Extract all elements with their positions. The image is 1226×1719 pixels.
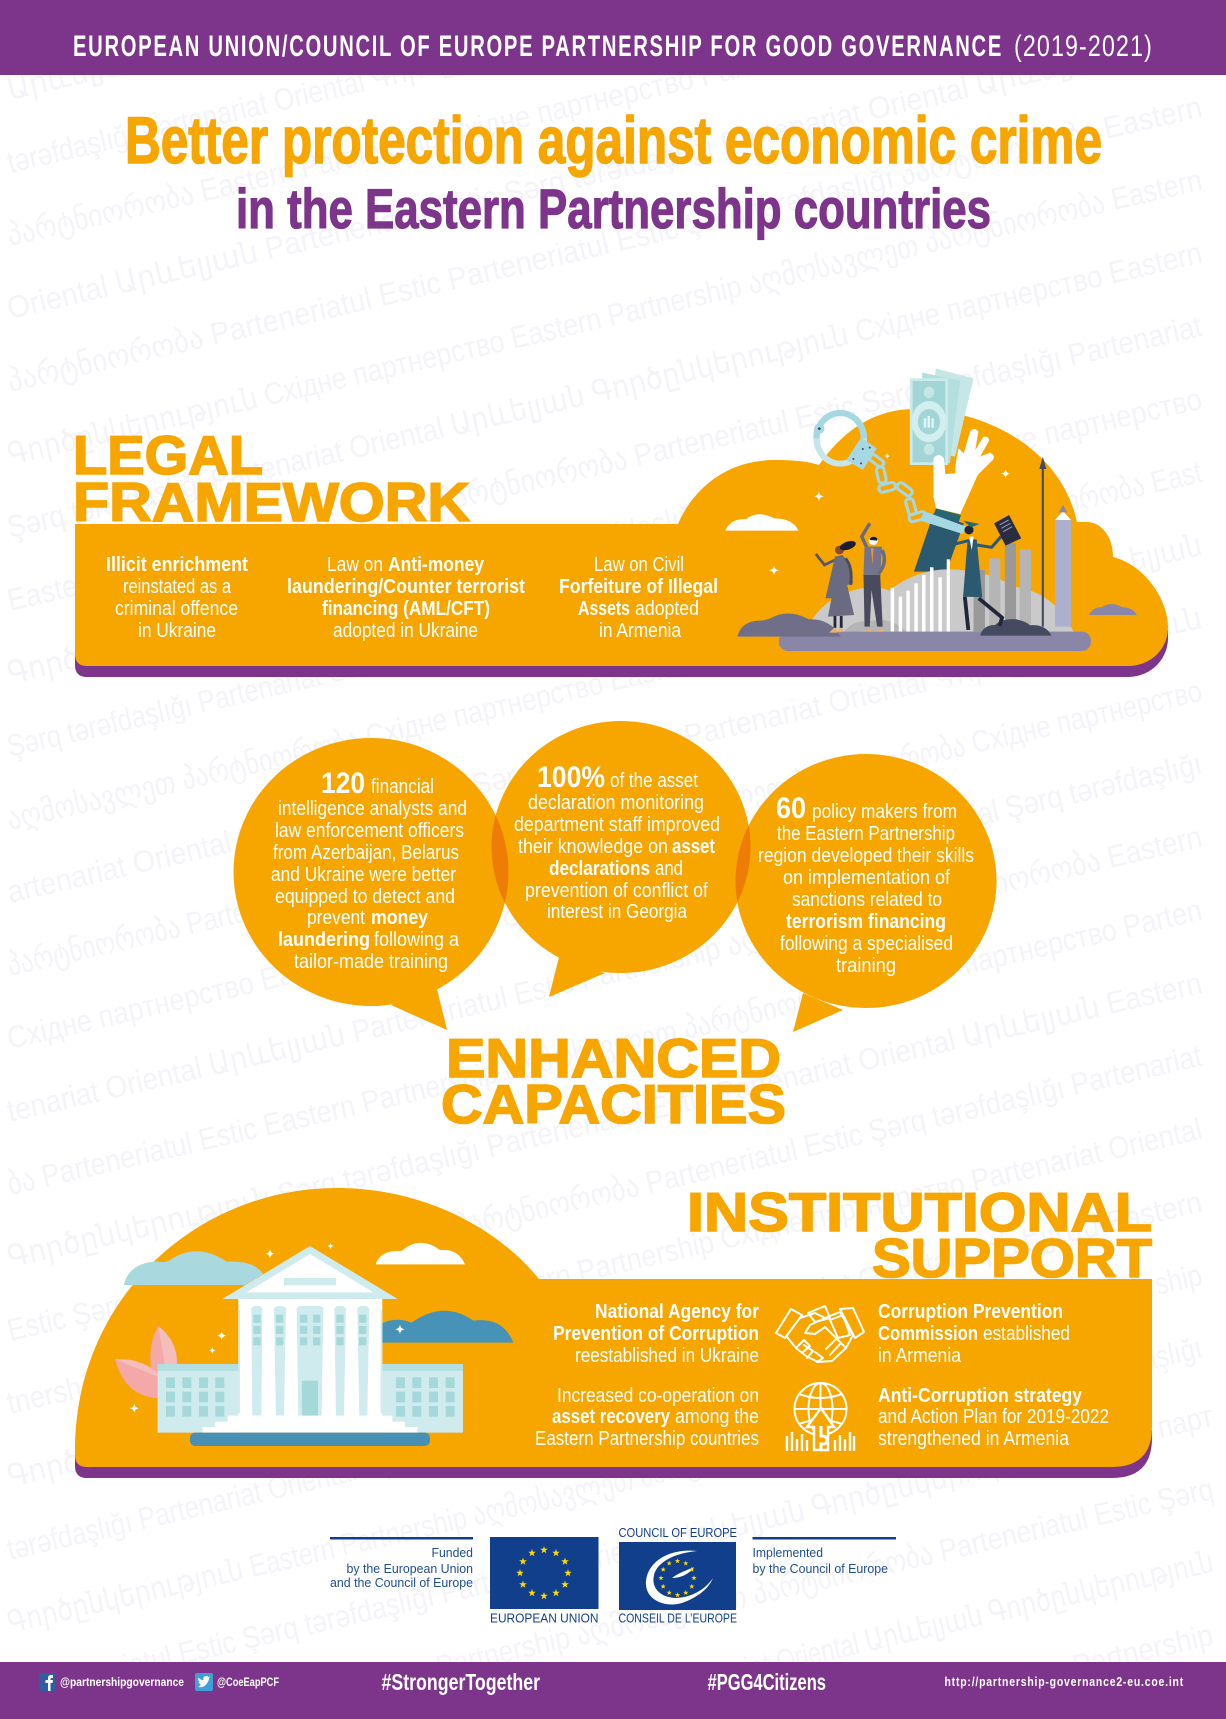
- legal framework heading: LEGAL: [73, 424, 263, 486]
- icon: globe with arrow and puzzle: [787, 1383, 854, 1451]
- legal framework shadow shape: [75, 630, 1168, 677]
- legal framework orange cloud band: [75, 409, 1168, 666]
- panel: institutional support: [75, 1181, 1152, 1478]
- text: 60 policy makers: sanctions related to: [792, 889, 942, 911]
- main portico: [190, 1246, 430, 1446]
- text: 100% staff: asset: [672, 836, 715, 858]
- text: corruption prevention commission: in Armenia: [878, 1345, 962, 1367]
- text: anti-money laundering law: adopted in Ukraine: [333, 620, 478, 642]
- hills and bars: [805, 543, 1073, 632]
- text: 120 officers: money: [371, 907, 429, 929]
- figure: woman: [816, 539, 857, 633]
- text: 60 policy makers: on implementation of: [783, 867, 950, 889]
- text: civil forfeiture law: Law on Civil: [594, 554, 684, 576]
- institutional support heading: INSTITUTIONAL: [687, 1181, 1152, 1243]
- text: anti-money laundering law: Law on: [327, 554, 383, 576]
- institutional support orange dome band: [75, 1188, 1152, 1467]
- text: illicit enrichment: reinstated as a: [123, 576, 232, 598]
- text: 120 officers: 120: [321, 767, 365, 800]
- icon: facebook: [39, 1673, 55, 1691]
- text: national agency: National Agency for: [595, 1301, 759, 1323]
- text: illicit enrichment: criminal offence: [115, 598, 238, 620]
- logo: Council of Europe: CONSEIL DE L’EUROPE: [618, 1612, 737, 1626]
- clouds: [124, 1243, 513, 1343]
- text: twitter handle: @CoeEapPCF: [217, 1675, 279, 1689]
- text: 60 policy makers: policy makers from: [812, 801, 957, 823]
- text: 100% staff: [514, 761, 720, 923]
- text: asset recovery: Eastern Partnership countries: [535, 1428, 759, 1450]
- text: 60 policy makers: terrorism financing: [786, 911, 946, 933]
- enhanced capacities heading: CAPACITIES: [441, 1073, 786, 1135]
- text: 100% staff: their knowledge on: [518, 836, 668, 858]
- text: 120 officers: intelligence analysts and: [278, 798, 467, 820]
- text: corruption prevention commission: [878, 1301, 1070, 1367]
- text: 120 officers: [271, 767, 467, 973]
- text: 120 officers: laundering: [278, 929, 370, 951]
- text: civil forfeiture law: Forfeiture of Illegal: [559, 576, 718, 598]
- institutional support shadow shape: [75, 1430, 1152, 1478]
- text: 60 policy makers: training: [836, 955, 896, 977]
- text: civil forfeiture law: Assets: [578, 598, 630, 620]
- text: anti-money laundering law: laundering/Counter terrorist: [287, 576, 525, 598]
- header banner: (2019-2021): [1014, 30, 1153, 63]
- text: 60 policy makers: following a specialised: [780, 933, 953, 955]
- text: civil forfeiture law: in Armenia: [599, 620, 682, 642]
- figure: man: [861, 523, 884, 632]
- text: anti-money laundering law: Anti-money: [388, 554, 485, 576]
- text: facebook handle: @partnershipgovernance: [60, 1675, 184, 1689]
- text: 120 officers: tailor-made training: [294, 951, 448, 973]
- text: anti-money laundering law: financing (AML/CFT): [322, 598, 490, 620]
- text: anti-corruption strategy: [878, 1385, 1109, 1450]
- panel: legal framework: [73, 368, 1168, 677]
- funded by text: Funded: [432, 1546, 473, 1560]
- text: 120 officers: from Azerbaijan, Belarus: [273, 842, 459, 864]
- logo: Council of Europe: COUNCIL OF EUROPE: [618, 1526, 737, 1540]
- title: in the Eastern Partnership countries: [236, 177, 991, 240]
- text: 100% staff: and: [655, 858, 683, 880]
- sparkles: [130, 1243, 405, 1413]
- icon: twitter: [195, 1673, 213, 1691]
- illustration: justice and money: [725, 368, 1137, 651]
- text: 100% staff: declarations: [549, 858, 650, 880]
- text: anti-corruption strategy: and Action Plan for 2019-2022: [878, 1406, 1109, 1428]
- text: asset recovery: [535, 1385, 759, 1450]
- text: illicit enrichment: [106, 554, 248, 642]
- icon: handshake: [776, 1306, 864, 1362]
- icon: handcuff and chain: [814, 413, 927, 522]
- text: 60 policy makers: [758, 792, 974, 977]
- legal framework heading: [73, 424, 470, 533]
- text: illicit enrichment: in Ukraine: [138, 620, 216, 642]
- text: civil forfeiture law: [559, 554, 718, 642]
- institutional support heading: [687, 1181, 1152, 1289]
- funded by text: by the European Union: [346, 1562, 473, 1576]
- icon: banknotes: [910, 368, 974, 465]
- text: 100% staff: department staff improved: [514, 814, 720, 836]
- logo: European Union flag: EUROPEAN UNION: [490, 1610, 598, 1626]
- logo: European Union flag: [490, 1537, 598, 1626]
- leaves: [115, 1326, 177, 1398]
- text: national agency: Prevention of Corruption: [553, 1323, 759, 1345]
- text: 120 officers: prevent: [307, 907, 365, 929]
- base and clouds: [725, 514, 1137, 651]
- text: 120 officers: and Ukraine were better: [271, 864, 456, 886]
- text: hashtag PGG4Citizens: #PGG4Citizens: [708, 1669, 826, 1695]
- text: 60 policy makers: the Eastern Partnership: [777, 823, 955, 845]
- text: corruption prevention commission: Corruption Prevention: [878, 1301, 1063, 1323]
- text: 60 policy makers: 60: [776, 792, 806, 825]
- legal framework heading: FRAMEWORK: [73, 471, 470, 533]
- text: anti-corruption strategy: strengthened in Armenia: [878, 1428, 1070, 1450]
- funded by text: and the Council of Europe: [330, 1576, 473, 1590]
- speech bubble: 120 officers: [234, 738, 508, 1030]
- text: 100% staff: declaration monitoring: [528, 792, 704, 814]
- bubble overlaps: [492, 721, 750, 973]
- enhanced capacities heading: [441, 1027, 786, 1135]
- text: 100% staff: prevention of conflict of: [525, 880, 708, 902]
- icon: hand grabbing money: [914, 429, 994, 572]
- speech bubble: 60 policy makers: [736, 754, 996, 1032]
- text: hashtag stronger together: #StrongerTogether: [382, 1669, 540, 1695]
- implemented by text: by the Council of Europe: [752, 1562, 888, 1576]
- funded by text: [330, 1537, 473, 1590]
- implemented by text: [752, 1537, 896, 1576]
- enhanced capacities heading: ENHANCED: [446, 1027, 781, 1089]
- footer banner: [0, 1662, 1226, 1719]
- text: asset recovery: Increased co-operation on: [557, 1385, 759, 1407]
- text: asset recovery: asset recovery: [552, 1406, 671, 1428]
- text: national agency: [553, 1301, 759, 1367]
- text: 120 officers: law enforcement officers: [275, 820, 464, 842]
- logos and funding credits: [330, 1526, 896, 1626]
- text: asset recovery: among the: [675, 1406, 759, 1428]
- text: 100% staff: of the asset: [610, 770, 698, 792]
- institutional support heading: SUPPORT: [872, 1227, 1152, 1289]
- text: corruption prevention commission: established: [983, 1323, 1070, 1345]
- illustration: government building: [115, 1243, 513, 1446]
- implemented by text: Implemented: [752, 1546, 823, 1560]
- text: 120 officers: equipped to detect and: [275, 886, 455, 908]
- icon: pencil tower and arrow: [1039, 457, 1071, 627]
- text: illicit enrichment: Illicit enrichment: [106, 554, 248, 576]
- text: anti-corruption strategy: Anti-Corruption strategy: [878, 1385, 1083, 1407]
- text: 100% staff: 100%: [537, 761, 605, 794]
- text: 120 officers: financial: [371, 776, 434, 798]
- text: national agency: reestablished in Ukraine: [575, 1345, 759, 1367]
- text: civil forfeiture law: adopted: [635, 598, 699, 620]
- text: corruption prevention commission: Commission: [878, 1323, 978, 1345]
- speech bubble: 100% staff: [492, 721, 750, 997]
- figure: judge: [938, 515, 1021, 630]
- text: 60 policy makers: region developed their skills: [758, 845, 974, 867]
- title: [125, 103, 1102, 240]
- logo: Council of Europe: [618, 1526, 737, 1626]
- text: anti-money laundering law: [287, 554, 525, 642]
- text: 120 officers: following a: [374, 929, 460, 951]
- background watermark text: Արևելյան Partnership: [4, 5, 304, 107]
- wings: [158, 1364, 463, 1433]
- panel: enhanced capacities speech bubbles: [234, 721, 996, 1135]
- text: 100% staff: interest in Georgia: [547, 901, 688, 923]
- decorative sparkles: [769, 453, 1010, 575]
- header banner: [0, 0, 1226, 75]
